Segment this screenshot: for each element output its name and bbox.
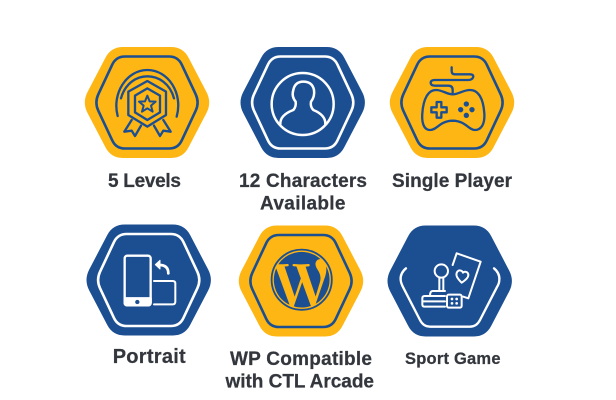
- label: Single Player: Single Player: [392, 171, 513, 192]
- hexagon outline: blue: [401, 56, 503, 148]
- icon: game controller: [422, 67, 484, 130]
- hexagon: yellow: [239, 226, 363, 336]
- hexagon outline: white: [252, 56, 353, 148]
- label: Portrait: Portrait: [113, 346, 186, 368]
- hexagon: yellow: [85, 47, 209, 158]
- badge: 5 Levels: [85, 47, 209, 192]
- badge: Sport Game: [388, 226, 512, 368]
- hexagon: blue: [388, 226, 512, 336]
- label: Sport Game: Sport Game: [405, 350, 500, 368]
- icon: medal with star: [116, 70, 178, 136]
- hexagon: blue: [86, 224, 211, 336]
- label: WP Compatible with CTL Arcade: WP Compatible: [230, 349, 372, 370]
- icon: rotate phone: [125, 256, 175, 305]
- icon: WordPress logo: [272, 250, 332, 310]
- hexagon: yellow: [390, 47, 514, 158]
- label: 12 Characters Available: 12 Characters: [239, 171, 367, 192]
- badge: WP Compatible with CTL Arcade: with CTL Arcade: [224, 372, 374, 392]
- badge: 12 Characters Available: Available: [260, 194, 346, 214]
- badge: Single Player: [390, 47, 514, 192]
- badge: WP Compatible with CTL Arcade: [224, 226, 374, 392]
- label: 5 Levels: 5 Levels: [108, 171, 181, 192]
- hexagon outline: white: [98, 234, 199, 326]
- hexagon outline: blue: [96, 56, 198, 148]
- icon: user in circle: [272, 73, 334, 135]
- badge: Portrait: [86, 224, 211, 368]
- hexagon: blue: [241, 47, 365, 158]
- hexagon outline: blue: [250, 235, 352, 327]
- icon: joystick, dice and card with frame: [401, 253, 499, 327]
- badge: 12 Characters Available: [239, 47, 367, 214]
